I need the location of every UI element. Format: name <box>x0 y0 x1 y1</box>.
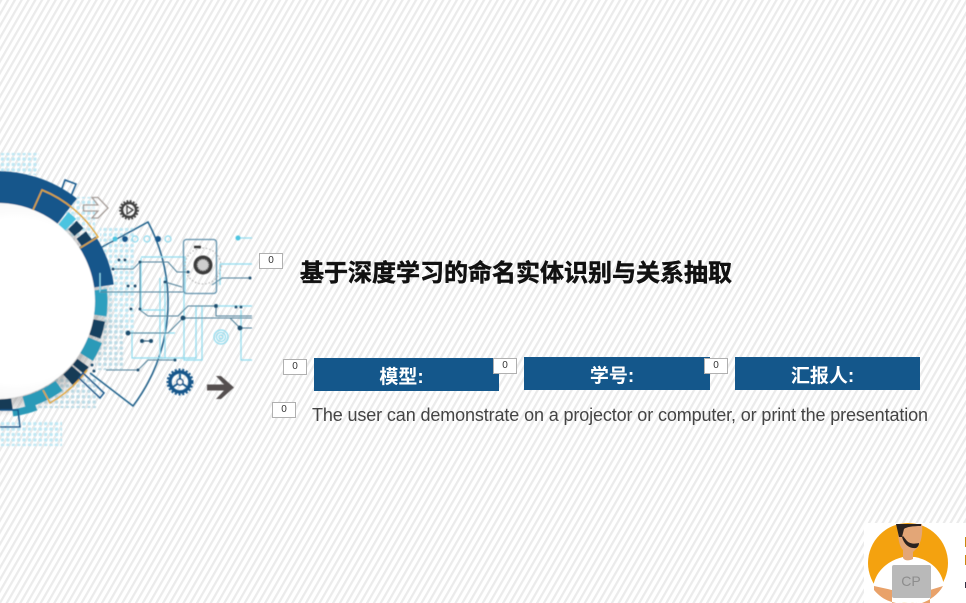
orange circle <box>868 523 948 603</box>
cut-off logo marks at right edge <box>965 537 966 588</box>
icon: blue gear <box>168 370 192 394</box>
hero graphic: technology ring and circuit <box>0 150 252 452</box>
placeholder box <box>704 358 728 374</box>
ring shadow <box>0 196 115 416</box>
circuit nodes <box>90 236 252 372</box>
subtitle text: The user can demonstrate on a projector or computer, or print the presentation <box>312 405 928 425</box>
ring segments <box>0 150 148 452</box>
bar: model <box>314 358 499 391</box>
hair and beard <box>896 524 921 548</box>
placeholder box <box>259 253 283 269</box>
face <box>898 524 922 560</box>
halftone dots <box>0 153 134 446</box>
placeholder box <box>272 402 296 418</box>
circuit lines <box>100 238 252 360</box>
placeholder box: 0 <box>268 255 274 266</box>
icon: device with wheel <box>184 240 221 294</box>
placeholder box: 0 <box>292 361 298 372</box>
placeholder box <box>283 359 307 375</box>
icon: outlined arrow <box>84 198 108 218</box>
icon: dark gear <box>120 201 138 219</box>
placeholder box: 0 <box>281 404 287 415</box>
bar: student id: 学号: <box>590 366 634 387</box>
avatar badge <box>864 523 966 603</box>
placeholder box <box>493 358 517 374</box>
laptop: CP <box>901 573 921 589</box>
white central disc <box>0 203 95 399</box>
gold outlines <box>33 190 98 403</box>
placeholder box: 0 <box>502 360 508 371</box>
title: 基于深度学习的命名实体识别与关系抽取 <box>300 259 732 287</box>
large sector outline <box>90 222 168 406</box>
open ring nodes <box>132 236 228 344</box>
bar: presenter: 汇报人: <box>791 366 854 387</box>
bar: presenter <box>735 357 920 390</box>
arms <box>874 586 943 603</box>
small outlined boxes <box>0 180 104 427</box>
bar: model: 模型: <box>379 367 424 388</box>
person torso <box>873 557 944 603</box>
placeholder box: 0 <box>713 360 719 371</box>
icon: solid arrow <box>207 376 234 399</box>
bar: student id <box>524 357 710 390</box>
